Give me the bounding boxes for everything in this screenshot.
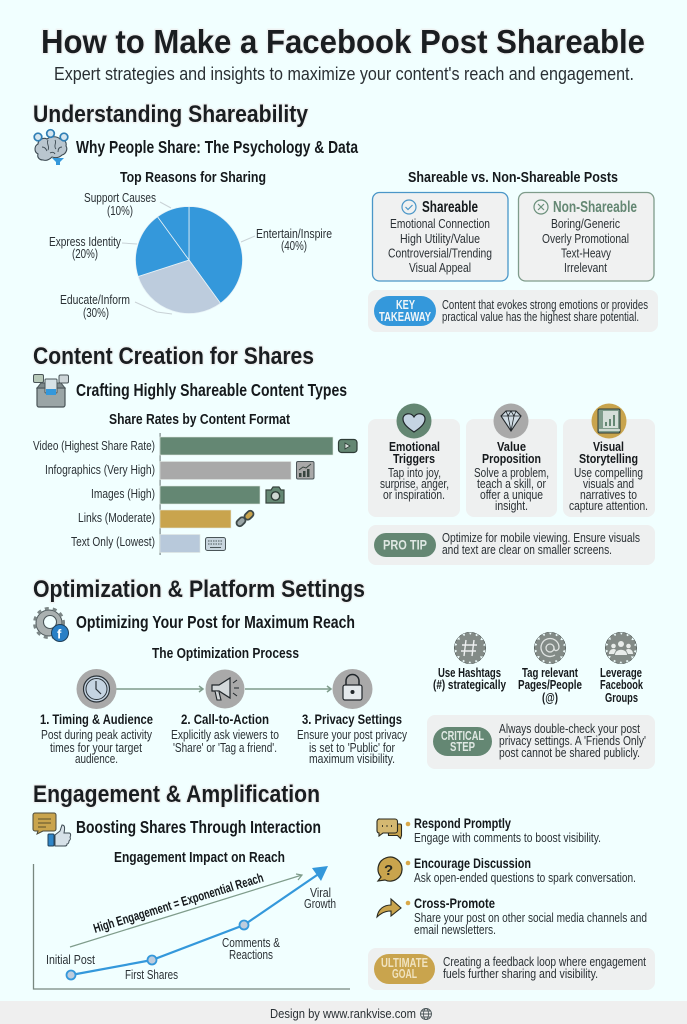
bar chart: share rates by format: Text Only (Lowest) [71,534,155,549]
tip: encourage discussion: Ask open-ended questions to spark conversation. [414,871,636,885]
badge: tag pages and people: Pages/People [518,677,582,692]
tip: respond promptly [377,815,601,845]
pie chart: reasons for sharing: (40%) [281,239,307,253]
line chart: engagement impact on reach: Reactions [229,948,273,962]
card: visual storytelling [563,404,655,517]
card: emotional triggers: Triggers [393,451,435,466]
badge: facebook groups: Leverage [600,665,642,680]
card: emotional triggers: Tap into joy, [388,466,441,480]
badge: hashtags: (#) strategically [433,677,507,692]
icon: comment and thumbs up [33,813,71,846]
card: value proposition: teach a skill, or [477,477,546,491]
bar chart: share rates by format: Infographics (Very High) [45,462,155,477]
arrow: growth head [312,866,328,881]
step 3: privacy settings: is set to 'Public' for [309,741,395,755]
callout: ultimate goal: ULTIMATE [381,956,428,970]
step 1: timing and audience: 1. Timing & Audience [40,711,153,727]
step 1: timing and audience [40,669,153,766]
arrow: step 1 to 2 [116,686,203,692]
panel: shareable: Shareable [422,199,478,216]
card: value proposition: Value [497,439,526,454]
icon: video [338,440,357,452]
callout: key takeaway: KEY [396,298,415,312]
bar chart: share rates by format: Images (High) [91,486,155,501]
card: value proposition [466,404,557,517]
callout: pro tip: Optimize for mobile viewing. Ensure visuals [442,531,640,545]
card: visual storytelling: Visual [593,439,624,454]
card: visual storytelling: narratives to [580,488,637,502]
subheading: Optimizing your post: Optimizing Your Post for Maximum Reach [76,612,355,632]
callout: key takeaway [368,290,658,332]
pie chart: reasons for sharing: (20%) [72,247,98,261]
step 1: timing and audience: times for your target [50,741,142,755]
step 1: timing and audience: Post during peak activity [41,728,153,742]
badge: facebook groups [600,632,644,705]
panel: non-shareable: Boring/Generic [551,216,620,231]
badge: hashtags: Use Hashtags [438,665,501,680]
card: visual storytelling: capture attention. [569,499,648,513]
icon: camera [266,487,284,503]
step 3: privacy settings: maximum visibility. [309,752,395,766]
icon: check circle [402,200,416,214]
line chart: engagement impact on reach [34,864,350,989]
step 2: call to action [171,670,279,755]
bar chart: share rates by format [33,433,357,555]
card: value proposition: insight. [495,499,528,513]
step 3: privacy settings: Ensure your post privacy [297,728,408,742]
icon: gear with facebook badge: f [57,626,62,642]
icon: chat bubbles [377,819,402,838]
card: emotional triggers [368,404,460,517]
icon: link [235,509,255,528]
tip: cross-promote: email newsletters. [414,923,496,937]
pie chart: reasons for sharing: Educate/Inform [60,293,130,307]
card: emotional triggers: Emotional [389,439,440,454]
tip: encourage discussion: Encourage Discussion [414,855,531,871]
card: emotional triggers: or inspiration. [383,488,445,502]
icon: keyboard [206,538,226,550]
footer [0,1001,687,1024]
icon: diamond [494,404,528,438]
footer: Design by www.rankvise.com [270,1006,416,1021]
line chart: engagement impact on reach: Viral [310,886,331,900]
subheading: Boosting shares: Boosting Shares Through Interaction [76,817,321,837]
card: emotional triggers: surprise, anger, [380,477,449,491]
subtitle: Expert strategies and insights to maximize your content's reach and engagement. [54,64,634,84]
step 2: call to action: Explicitly ask viewers to [171,728,279,742]
card: visual storytelling: Use compelling [574,466,643,480]
card: value proposition: Proposition [482,451,541,466]
icon: gear with facebook badge [34,608,68,642]
callout: critical step: privacy settings. A 'Friends Only' [499,734,646,748]
card: visual storytelling: Storytelling [579,451,638,466]
heading: Engagement & Amplification: Engagement & Amplification [33,781,320,808]
heading: Content Creation for Shares: Content Creation for Shares [33,343,314,370]
chart title: Share Rates by Content Format: Share Rates by Content Format [109,412,290,428]
callout: key takeaway: TAKEAWAY [379,310,431,324]
callout: critical step: Always double-check your post [499,722,640,736]
arrow: trend [70,874,302,947]
badge: facebook groups: Facebook [600,677,644,692]
callout: ultimate goal: GOAL [392,967,417,981]
step 3: privacy settings [297,669,408,766]
line chart: engagement impact on reach: Initial Post [46,953,95,967]
icon: question bubble [378,857,402,881]
title: How to Make a Facebook Post Shareable [41,23,645,60]
bar chart: share rates by format: Video (Highest Share Rate) [33,438,155,453]
chart title: Engagement Impact on Reach: Engagement Impact on Reach [114,850,285,866]
panel: non-shareable: Irrelevant [564,260,607,275]
tip: respond promptly: Respond Promptly [414,815,511,831]
icon: content box [34,374,68,407]
callout: critical step: STEP [450,740,475,754]
callout: ultimate goal: Creating a feedback loop where engagement [443,955,646,969]
flow diagram: optimization process [40,669,408,766]
callout: critical step: CRITICAL [441,729,484,743]
step 2: call to action: 2. Call-to-Action [181,711,269,727]
callout: ultimate goal [368,948,655,990]
callout: pro tip: and text are clear on smaller screens. [442,543,612,557]
card: value proposition: Solve a problem, [474,466,549,480]
callout: pro tip [368,525,655,565]
icon: book [592,404,626,438]
pie chart: reasons for sharing [49,191,332,320]
callout: ultimate goal: fuels further sharing and visibility. [443,967,598,981]
panel: shareable: Visual Appeal [409,260,471,275]
heading: Optimization & Platform Settings: Optimization & Platform Settings [33,576,365,603]
panel: shareable: Controversial/Trending [388,246,492,260]
icon: heart [396,404,432,438]
icon: question bubble: ? [384,862,393,879]
icon: cross circle [534,200,548,214]
card: visual storytelling: visuals and [583,477,634,491]
tip: respond promptly: Engage with comments to boost visibility. [414,831,601,845]
icon: chart [296,462,314,479]
badge: tag pages and people [518,632,582,705]
badge: hashtags [433,632,507,692]
panel: non-shareable: Non-Shareable [553,199,637,216]
pie chart: reasons for sharing: (10%) [107,204,133,218]
callout: critical step [427,715,655,769]
line chart: engagement impact on reach: High Engagement = Exponential Reach [91,870,265,936]
step 3: privacy settings: 3. Privacy Settings [302,711,402,727]
line chart: engagement impact on reach: Comments & [222,936,281,950]
heading: Understanding Shareability: Understanding Shareability [33,101,309,128]
line chart: engagement impact on reach: First Shares [125,968,178,982]
step 1: timing and audience: audience. [75,752,118,766]
callout: critical step: post cannot be shared publicly. [499,746,640,760]
panel: shareable [372,192,508,281]
badge: tag pages and people: Tag relevant [522,665,578,680]
pie chart: reasons for sharing: (30%) [83,306,109,320]
icon: globe [420,1008,432,1020]
bar chart: share rates by format: Links (Moderate) [78,510,155,525]
panel: non-shareable: Text-Heavy [561,246,611,260]
badge: tag pages and people: (@) [542,690,558,705]
tip: encourage discussion [378,855,636,885]
pie chart: reasons for sharing: Express Identity [49,235,122,249]
icon: brain with speech bubbles [34,130,68,165]
callout: pro tip: PRO TIP [383,536,427,552]
chart title: The Optimization Process: The Optimization Process [152,646,299,662]
badge: facebook groups: Groups [605,690,638,705]
line chart: engagement impact on reach: Growth [304,897,336,911]
panel: shareable: Emotional Connection [390,216,490,231]
chart title: Top Reasons for Sharing: Top Reasons for Sharing [120,170,266,186]
arrow: step 2 to 3 [245,686,331,692]
subheading: Crafting content types: Crafting Highly Shareable Content Types [76,380,347,400]
tip: cross-promote [377,895,647,937]
panel: non-shareable [518,192,654,281]
panel: non-shareable: Overly Promotional [542,231,629,246]
subheading: Why People Share: Why People Share: The Psychology & Data [76,137,358,157]
step 2: call to action: 'Share' or 'Tag a friend'. [173,741,277,755]
pie chart: reasons for sharing: Entertain/Inspire [256,227,332,241]
icon: share arrow [377,899,401,917]
pie chart: reasons for sharing: Support Causes [84,191,156,205]
heading: Shareable vs Non-Shareable: Shareable vs. Non-Shareable Posts [408,170,618,186]
card: value proposition: offer a unique [480,488,543,502]
panel: shareable: High Utility/Value [400,231,480,246]
tip: cross-promote: Cross-Promote [414,895,495,911]
